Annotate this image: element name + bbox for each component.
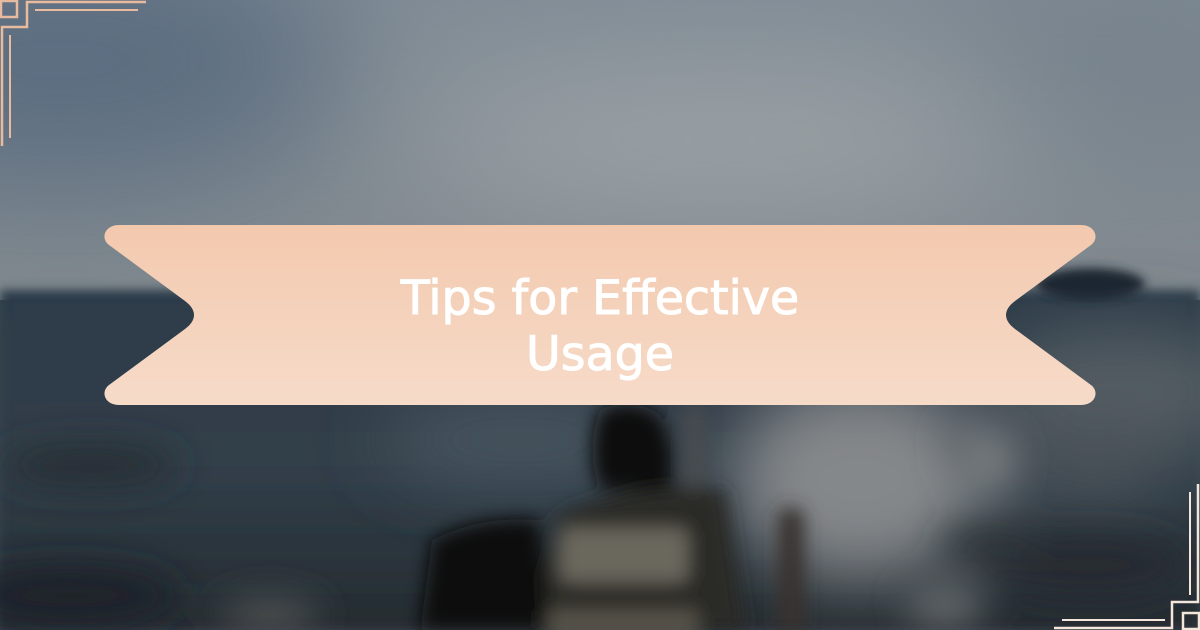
corner ornament: bottom right xyxy=(1054,484,1199,629)
figures xyxy=(592,404,673,490)
island silhouette xyxy=(1035,268,1145,300)
decorative banner ribbon xyxy=(104,225,1096,405)
title: Tips for Effective xyxy=(400,271,799,326)
title: Usage xyxy=(526,327,674,382)
corner ornament: top left xyxy=(1,1,146,146)
